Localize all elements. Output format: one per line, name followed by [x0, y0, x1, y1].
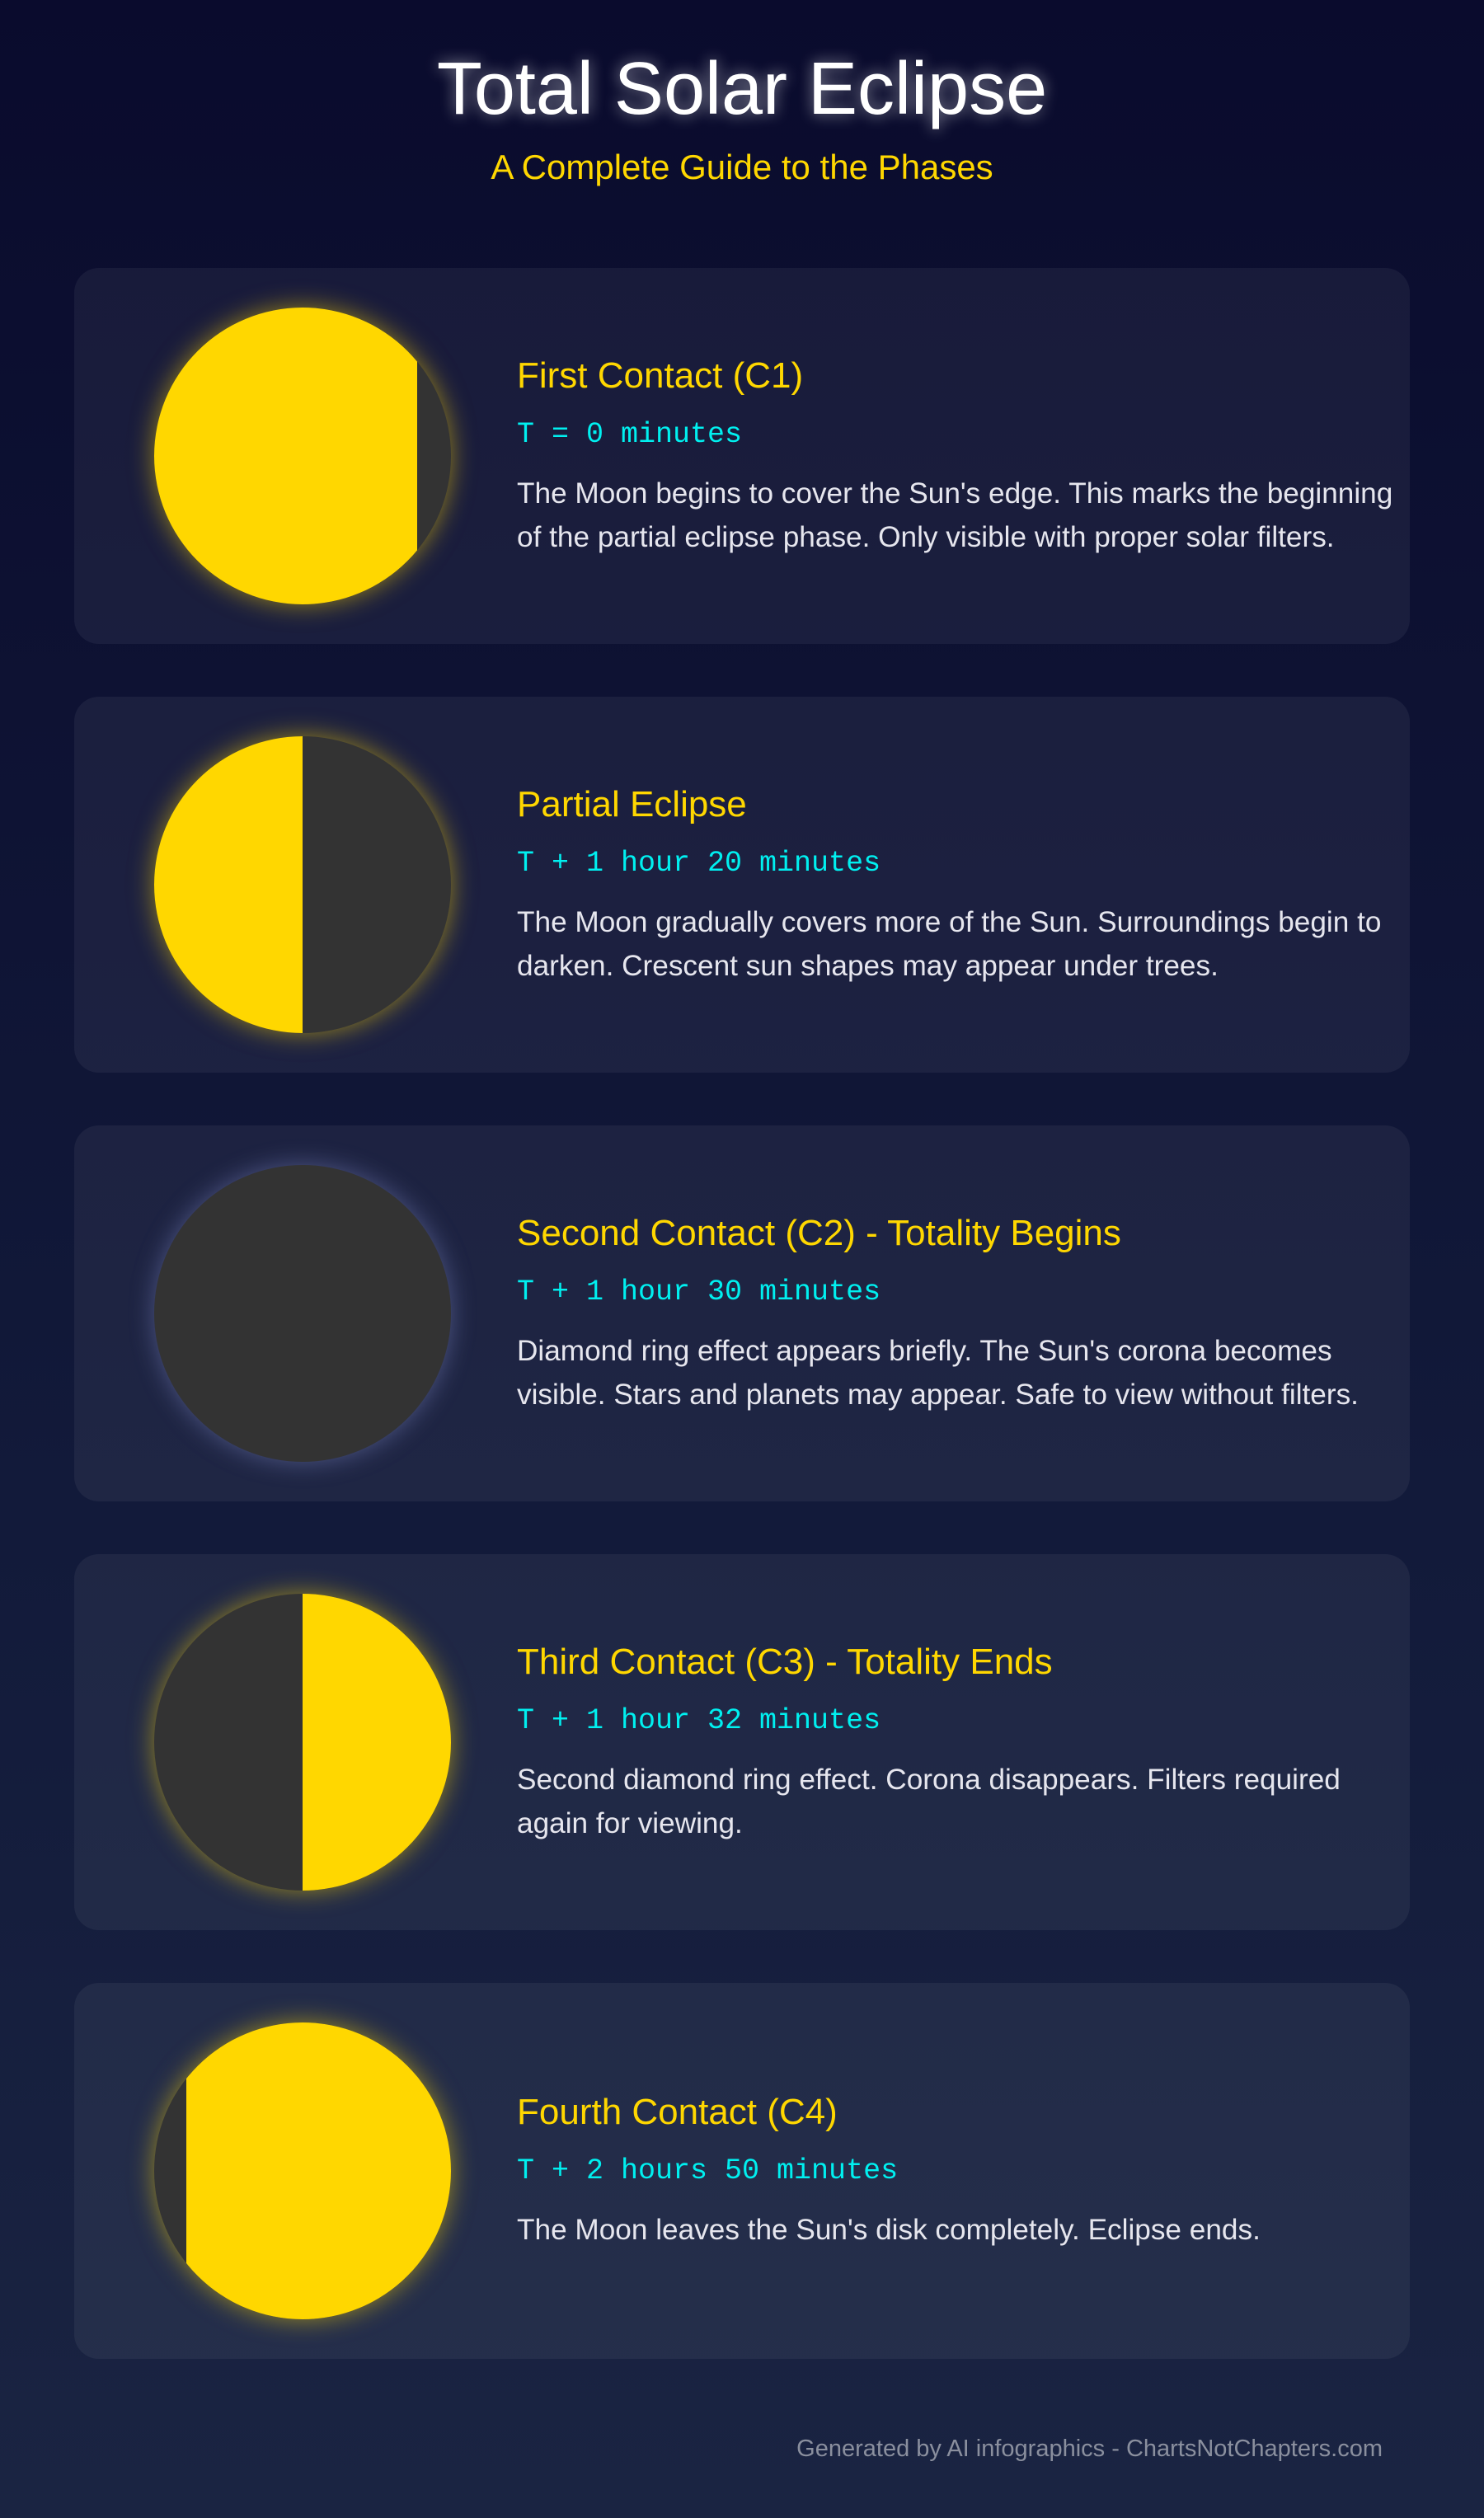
panel: second contact [74, 1125, 1410, 1501]
icon: sun first contact [154, 308, 451, 604]
text: first contact: First Contact (C1) [517, 355, 803, 396]
text: first contact: T = 0 minutes [517, 417, 742, 450]
icon: totality [154, 1165, 451, 1462]
title: Total Solar Eclipse [437, 48, 1047, 130]
footer: Generated by AI infographics - ChartsNotChapters.com [796, 2436, 1383, 2462]
text: third contact: Third Contact (C3) - Totality Ends [517, 1641, 1053, 1682]
text: partial eclipse: The Moon gradually covers more of the Sun. Surroundings begin to darken. Crescent sun shapes may appear under trees. [517, 905, 1381, 981]
text: partial eclipse: T + 1 hour 20 minutes [517, 846, 881, 879]
icon: sun fourth contact [154, 2022, 451, 2319]
text: third contact: T + 1 hour 32 minutes [517, 1703, 881, 1736]
icon: half sun left [154, 736, 451, 1033]
text: partial eclipse: Partial Eclipse [517, 783, 747, 824]
text: fourth contact: T + 2 hours 50 minutes [517, 2154, 898, 2187]
panel: partial eclipse [74, 697, 1410, 1073]
text: first contact [517, 355, 1392, 552]
text: partial eclipse [517, 783, 1381, 981]
text: fourth contact: The Moon leaves the Sun's disk completely. Eclipse ends. [517, 2214, 1261, 2246]
text: second contact [517, 1212, 1359, 1410]
text: third contact [517, 1641, 1341, 1839]
text: fourth contact: Fourth Contact (C4) [517, 2092, 838, 2132]
icon: half sun right [154, 1594, 451, 1891]
panel: first contact [74, 268, 1410, 644]
subtitle: A Complete Guide to the Phases [491, 148, 993, 186]
text: fourth contact [517, 2092, 1261, 2246]
panel: fourth contact [74, 1983, 1410, 2359]
panel: third contact [74, 1554, 1410, 1930]
text: second contact: Second Contact (C2) - Totality Begins [517, 1212, 1121, 1253]
text: first contact: The Moon begins to cover the Sun's edge. This marks the beginning of the partial eclipse phase. Only visible with proper solar filters. [517, 477, 1392, 552]
text: second contact: Diamond ring effect appears briefly. The Sun's corona becomes visible. Stars and planets may appear. Safe to view without filters. [517, 1334, 1359, 1410]
text: third contact: Second diamond ring effect. Corona disappears. Filters required again for viewing. [517, 1763, 1341, 1839]
text: second contact: T + 1 hour 30 minutes [517, 1275, 881, 1308]
